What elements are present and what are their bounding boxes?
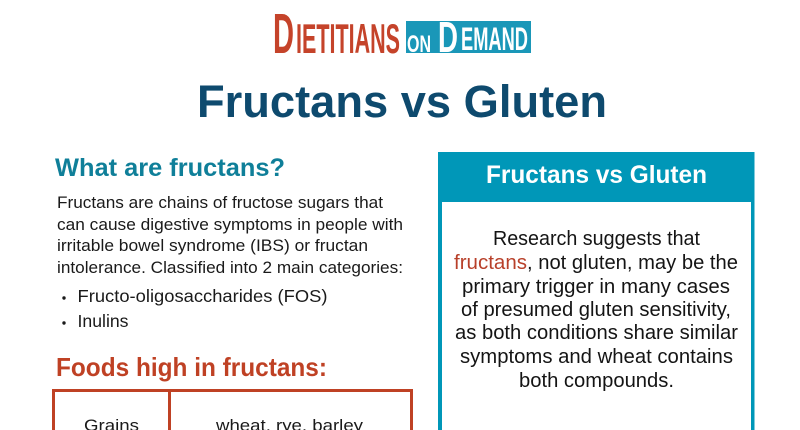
panel text: Research suggests that: [493, 228, 700, 250]
text block: fructans definition: Fructans are chains of fructose sugars that: [57, 193, 383, 212]
bullet list: categories: Fructo-oligosaccharides (FOS): [78, 286, 328, 306]
logo: Dietitians on Demand: IETITIANS: [296, 15, 400, 62]
panel text: of presumed gluten sensitivity,: [461, 299, 731, 321]
logo: Dietitians on Demand: D: [438, 13, 458, 62]
panel text: primary trigger in many cases: [462, 276, 730, 298]
bullet list: categories: [62, 286, 328, 331]
heading: what are fructans: What are fructans?: [55, 154, 285, 182]
text block: fructans definition: can cause digestive symptoms in people with: [57, 215, 403, 234]
title: Fructans vs Gluten: [197, 76, 607, 127]
logo: Dietitians on Demand: D: [273, 2, 294, 66]
logo: Dietitians on Demand: [273, 2, 531, 66]
panel text: symptoms and wheat contains: [460, 346, 733, 368]
panel: fructans vs gluten: [438, 152, 754, 430]
text block: fructans definition: intolerance. Classified into 2 main categories:: [57, 258, 403, 277]
heading: foods high in fructans: Foods high in fructans:: [56, 352, 327, 382]
panel text: , not gluten, may be the: [527, 252, 738, 274]
text block: fructans definition: irritable bowel syndrome (IBS) or fructan: [57, 236, 368, 255]
panel text: both compounds.: [519, 370, 674, 392]
panel text: as both conditions share similar: [455, 322, 738, 344]
logo: Dietitians on Demand: ON: [407, 31, 431, 58]
table: foods high in fructans: [54, 390, 412, 430]
text block: fructans definition: [57, 193, 403, 277]
panel heading: Fructans vs Gluten: [486, 161, 707, 189]
panel text: [454, 228, 738, 392]
logo: Dietitians on Demand: EMAND: [461, 21, 528, 57]
bullet list: categories: Inulins: [78, 311, 129, 331]
panel text: fructans: [454, 252, 527, 274]
